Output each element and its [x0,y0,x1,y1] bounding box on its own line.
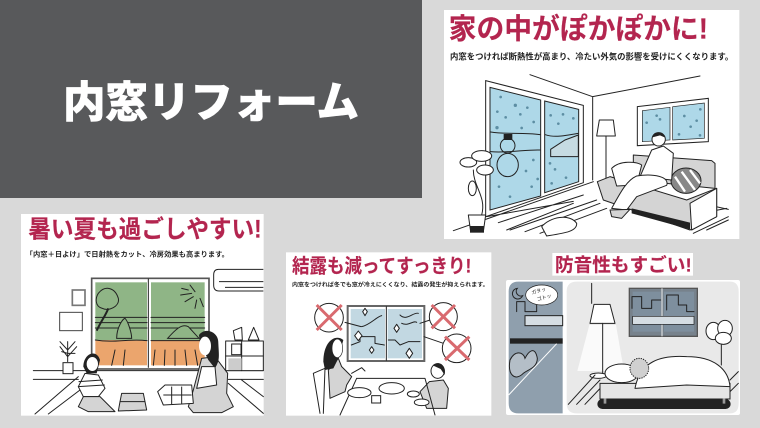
sofa [597,155,717,230]
folded towels [118,393,147,411]
trees [509,351,537,377]
seated man [610,132,673,218]
houseplant [60,342,77,374]
heading: soundproofing: 防音性もすごい! [555,254,692,275]
bed and sleeper [597,356,731,409]
window at night [629,288,697,336]
child [420,363,448,408]
floor lamp [577,304,624,378]
room lines [453,75,728,233]
girl [78,353,115,412]
small window [637,98,708,146]
large window with snow scene [486,81,583,217]
speech bubble: ガタッ [531,286,547,296]
window with garden scene [92,278,209,369]
outside night scene [509,282,563,413]
snowman [497,134,518,177]
title banner [0,0,422,198]
panel: soundproofing [506,253,740,415]
heading: condensation: 結露も減ってすっきり! [292,254,471,277]
window with condensation [348,306,424,361]
picture frame [72,290,85,305]
crossed out mold icons [315,303,471,363]
sun [181,285,203,308]
plant [706,320,732,365]
sleeping cat [542,217,577,236]
cushions [612,162,701,193]
table with dishes [340,378,435,415]
panel: warm home [444,10,739,239]
laundry basket [158,385,193,405]
text: cool summer description: 「内窓＋日よけ」で日射熱をカット、冷房効果も高まります。 [26,249,229,258]
photo board [60,312,82,331]
panel: cool summer [21,214,264,416]
woman [188,331,233,413]
snow covered car [551,135,578,157]
shelf [226,327,263,371]
tree [96,288,118,309]
speech bubble [526,285,558,305]
title banner: 内窓リフォーム [63,80,359,127]
floor lines [568,283,738,404]
woman at table [313,338,365,413]
panel: condensation [286,252,491,416]
bedroom background [506,280,740,415]
text: condensation description: 内窓をつければ冬でも窓が冷えにくくなり、結露の発生が抑えられます。 [292,281,489,289]
floor lamp [597,120,615,178]
text: warm home description: 内窓をつければ断熱性が高まり、冷たい外気の影響を受けにくくなります。 [450,50,733,61]
air conditioner [214,269,263,291]
floor lines [33,371,263,414]
heading: cool summer: 暑い夏も過ごしやすい! [28,214,262,243]
potted plant [460,151,493,233]
heading: warm home: 家の中がぽかぽかに! [449,13,708,46]
speech bubble: ゴトッ [536,292,552,303]
